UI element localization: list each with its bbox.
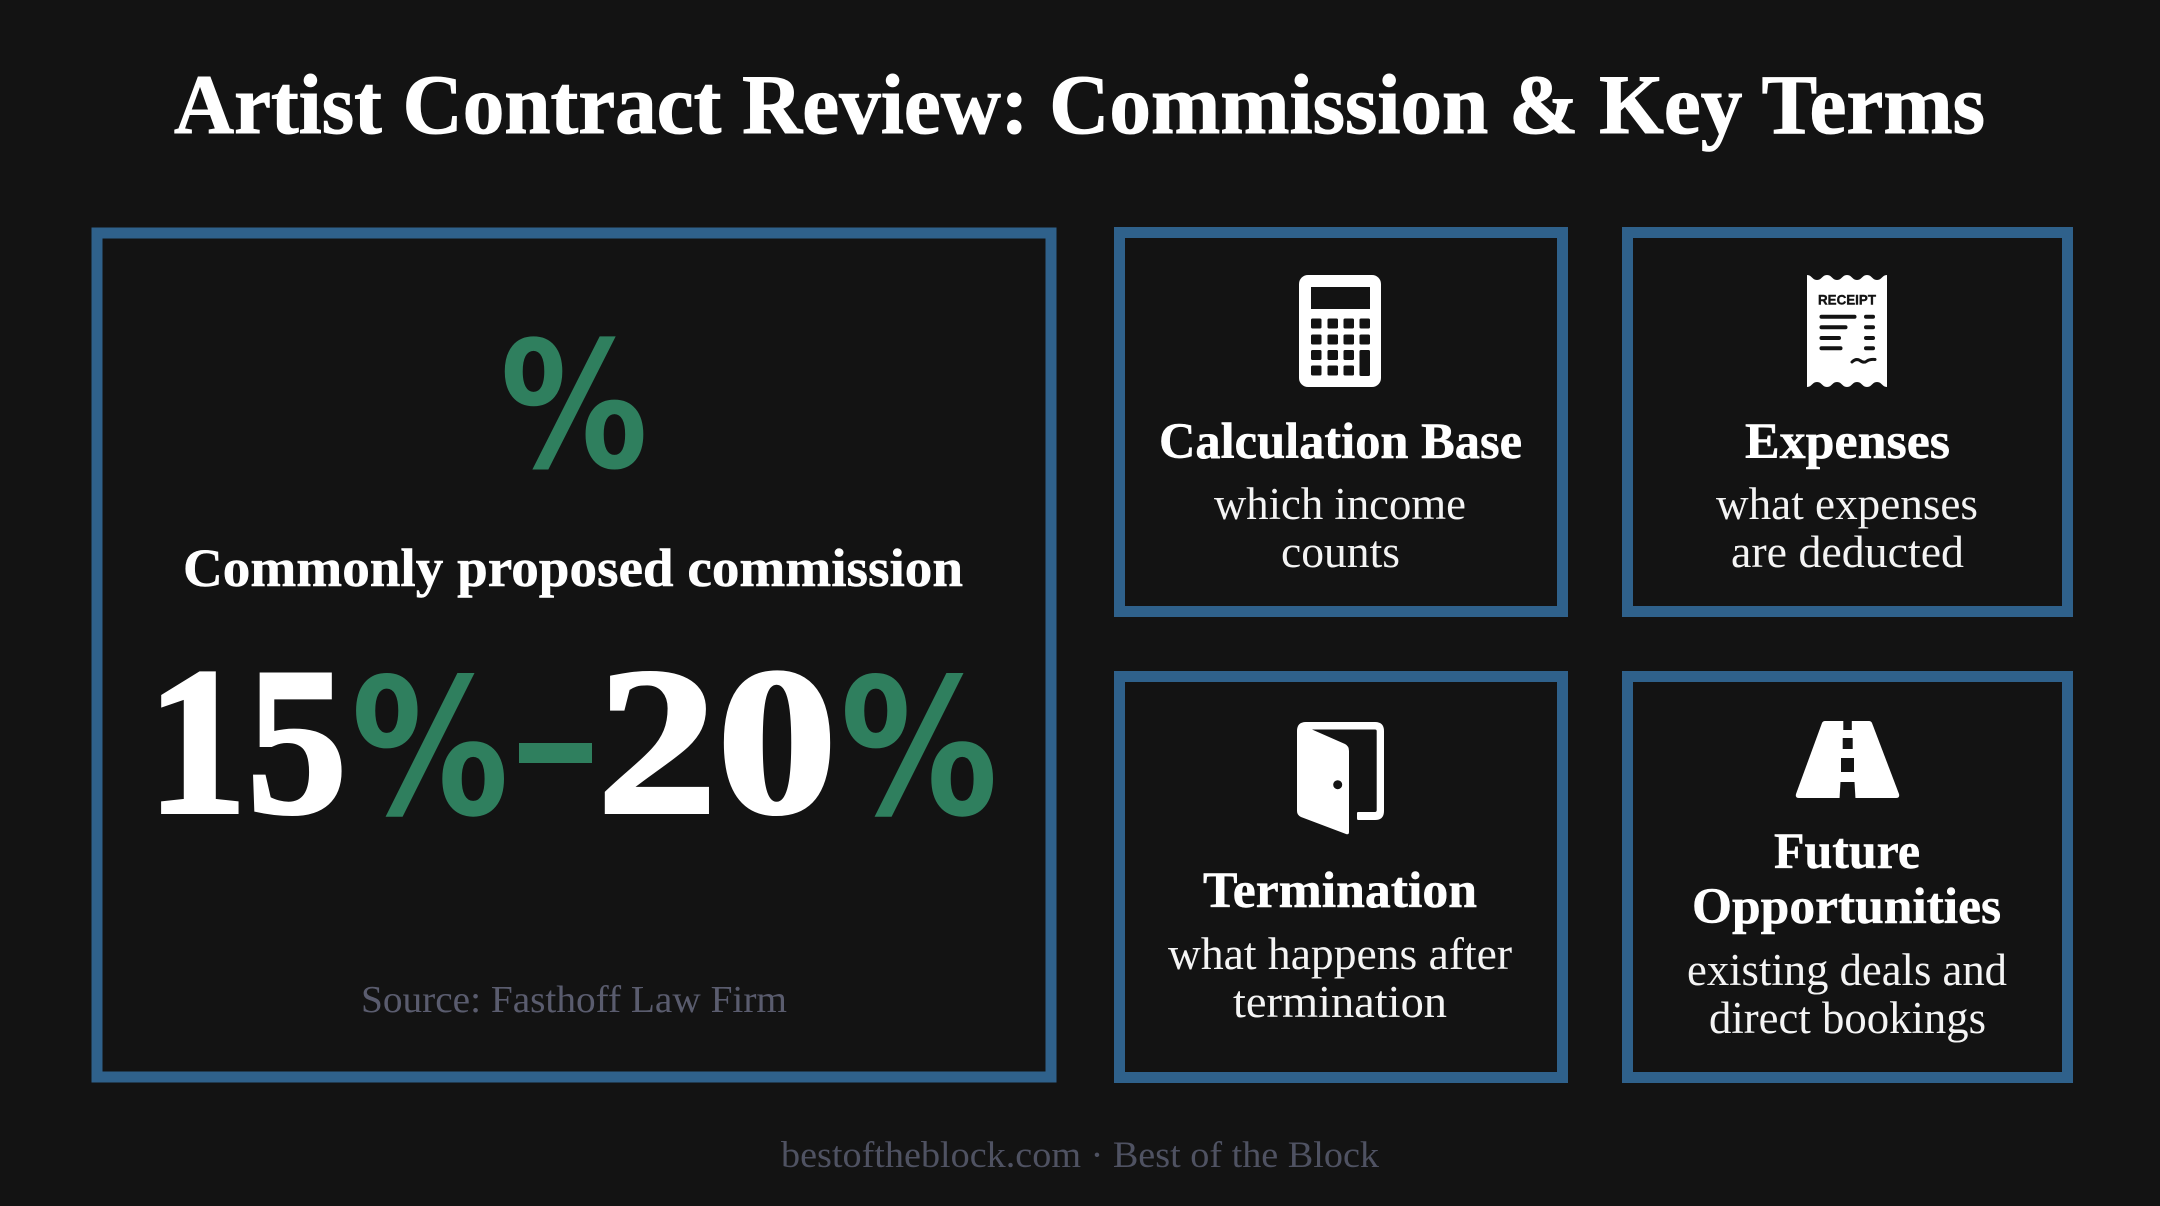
big range: 15%-20%: 20 (597, 626, 837, 858)
description (1214, 479, 1466, 577)
panel: future opportunities (1628, 676, 2068, 1078)
description (1168, 929, 1512, 1027)
heading: Termination (1203, 863, 1477, 919)
description: counts (1281, 527, 1400, 577)
description: what happens after (1168, 929, 1512, 979)
description: termination (1233, 977, 1447, 1027)
panel: commission (97, 233, 1051, 1077)
description: existing deals and (1687, 945, 2007, 995)
heading: Calculation Base (1159, 414, 1522, 470)
heading (1692, 824, 2001, 935)
footer: bestoftheblock.com · Best of the Block (781, 1135, 1380, 1176)
panel: termination (1120, 676, 1562, 1078)
big range: 15%-20%: % (351, 638, 509, 859)
panel: calculation base (1120, 232, 1562, 612)
title: Artist Contract Review: Commission & Key Terms (174, 58, 1985, 152)
description: are deducted (1731, 527, 1964, 577)
description: direct bookings (1709, 993, 1986, 1043)
heading: Opportunities (1692, 879, 2001, 935)
big range: 15%-20%: % (840, 638, 998, 859)
commission label: Commonly proposed commission (183, 538, 963, 598)
description (1716, 479, 1978, 577)
icon: receipt (1807, 275, 1887, 387)
icon: receipt: RECEIPT (1818, 292, 1876, 308)
big range: 15%-20% (147, 626, 998, 859)
heading: Expenses (1745, 414, 1950, 470)
description: what expenses (1716, 479, 1978, 529)
icon: door (1297, 722, 1384, 834)
panel: expenses (1628, 232, 2068, 612)
description (1687, 945, 2007, 1043)
description: which income (1214, 479, 1466, 529)
icon: calculator (1299, 275, 1381, 387)
icon: percent: % (500, 304, 648, 509)
big range: 15%-20%: 15 (147, 626, 347, 858)
icon: road (1796, 720, 1899, 799)
source note: Source: Fasthoff Law Firm (361, 979, 787, 1021)
heading: Future (1774, 824, 1920, 880)
